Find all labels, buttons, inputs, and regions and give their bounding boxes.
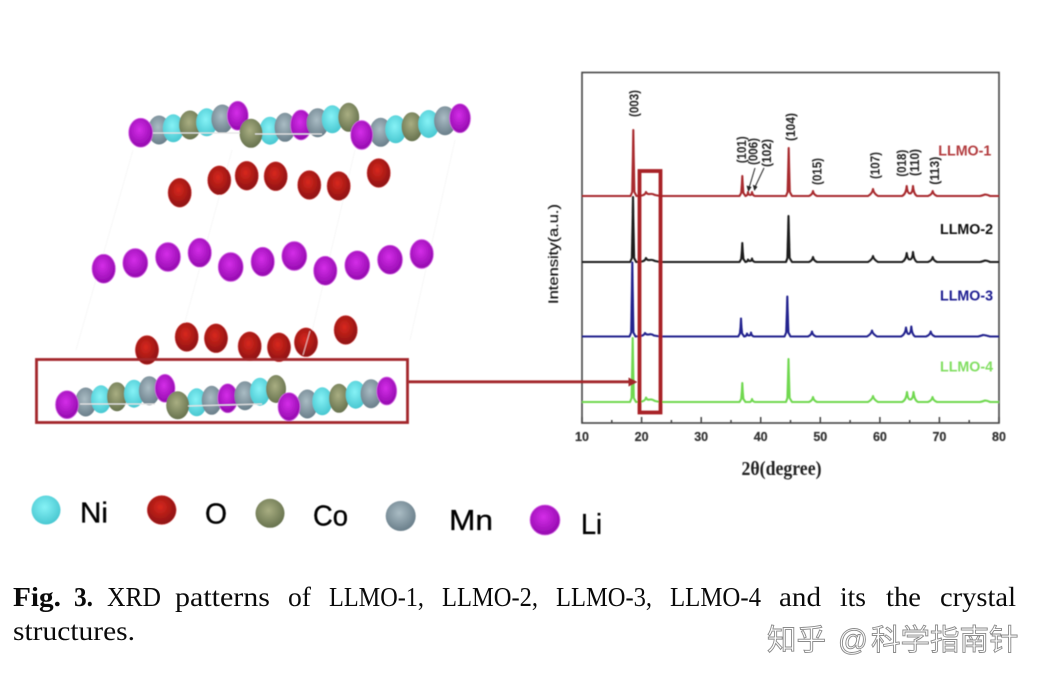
- panel: crystal structure: [36, 101, 470, 422]
- figure caption: of: [288, 582, 311, 612]
- series labels: LLMO-3: [940, 288, 993, 304]
- peak labels: (018): [895, 150, 909, 177]
- highlight box: 20-23 degree region: [640, 171, 660, 412]
- figure caption: LLMO-2,: [442, 582, 538, 612]
- legend: [32, 496, 602, 541]
- y axis title: Intensity(a.u.): [546, 204, 561, 304]
- figure caption: LLMO-3,: [556, 582, 652, 612]
- trace: LLMO-1: [582, 130, 999, 196]
- series labels: LLMO-4: [940, 360, 993, 376]
- panel: XRD chart: [546, 72, 1006, 480]
- watermark: 知乎: [767, 624, 826, 657]
- legend item: Mn: [386, 501, 493, 537]
- peak labels: (102): [760, 139, 774, 167]
- series labels: [938, 144, 993, 376]
- trace: LLMO-3: [582, 262, 999, 336]
- legend item: Li: Li: [581, 509, 602, 541]
- legend item: Li: [530, 505, 602, 541]
- watermark: @: [838, 624, 868, 657]
- figure caption: structures.: [13, 616, 135, 646]
- legend item: O: [147, 496, 227, 530]
- x axis title: 2θ(degree): [742, 459, 822, 480]
- x axis tick labels: 60: [873, 430, 887, 444]
- figure caption: LLMO-4: [670, 582, 761, 612]
- figure caption: and: [779, 582, 822, 612]
- x axis tick labels: 20: [635, 430, 649, 444]
- peak labels: (107): [868, 152, 882, 179]
- peak labels: (101): [735, 136, 749, 163]
- x axis tick labels: 50: [813, 430, 827, 444]
- series labels: LLMO-2: [940, 222, 993, 238]
- peak labels: (104): [784, 113, 798, 141]
- peak labels: [628, 90, 942, 185]
- peak labels: (110): [908, 149, 922, 176]
- figure caption: 3.: [74, 582, 93, 612]
- legend item: Co: Co: [313, 501, 348, 533]
- trace: LLMO-2: [582, 197, 999, 262]
- top transition-metal layer: [129, 101, 470, 150]
- x axis tick labels: 10: [575, 430, 589, 444]
- watermark: 科学指南针: [871, 624, 1019, 657]
- trace: LLMO-4: [582, 338, 999, 402]
- figure caption: patterns: [175, 582, 270, 612]
- figure caption: the: [886, 582, 921, 612]
- peak labels: (003): [628, 90, 642, 117]
- lower oxygen layer: [135, 316, 357, 364]
- figure caption: Fig.: [13, 582, 61, 612]
- arrows to (006) and (102) peaks: [746, 168, 764, 192]
- figure caption: LLMO-1,: [329, 582, 424, 612]
- lithium layer: [92, 238, 433, 285]
- peak labels: (113): [928, 157, 942, 185]
- figure caption: its: [840, 582, 866, 612]
- arrow from structure to chart: [408, 378, 638, 386]
- figure caption: [13, 582, 1016, 646]
- figure caption: crystal: [940, 582, 1016, 612]
- series labels: LLMO-1: [938, 144, 991, 160]
- x axis tick labels: 80: [992, 430, 1006, 444]
- x axis tick labels: 40: [754, 430, 768, 444]
- legend item: Co: [256, 499, 348, 533]
- legend item: Ni: [32, 496, 108, 530]
- legend item: Ni: Ni: [80, 498, 108, 530]
- upper oxygen layer: [168, 158, 390, 207]
- x axis tick labels: 30: [694, 430, 708, 444]
- x axis ticks: [582, 417, 999, 423]
- peak labels: (006): [746, 138, 760, 165]
- figure caption: XRD: [107, 582, 161, 612]
- chart frame: [582, 72, 999, 423]
- x axis tick labels: [575, 430, 1006, 444]
- legend item: Mn: Mn: [449, 505, 493, 537]
- highlight box around bottom layer: [36, 360, 408, 422]
- legend item: O: O: [205, 498, 227, 530]
- bottom transition-metal layer: [56, 374, 397, 421]
- x axis tick labels: 70: [932, 430, 946, 444]
- peak labels: (015): [810, 158, 824, 185]
